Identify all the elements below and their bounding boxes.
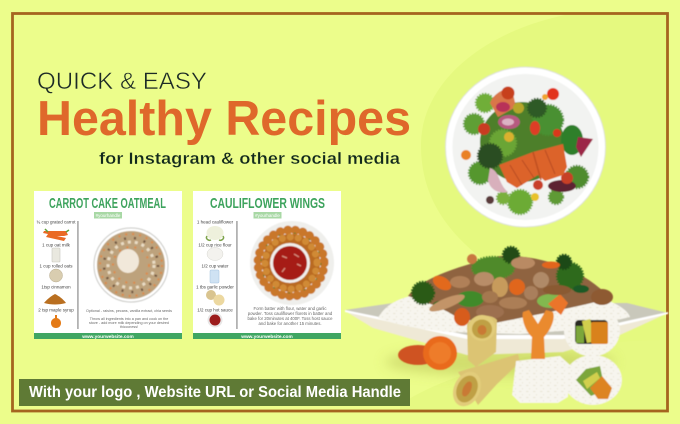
icon: shrimp nigiri [512, 310, 570, 403]
icon: carrot slices [398, 336, 457, 370]
instructions text: powder. Toss cauliflower florets in batter and [248, 311, 333, 316]
social handle tag [254, 212, 282, 218]
instructions text [248, 306, 333, 326]
social handle tag [94, 212, 122, 218]
icon: rectangular plate [345, 303, 668, 376]
icon: oatmeal bowl [94, 228, 168, 302]
social handle tag: #yourhandle [255, 213, 280, 218]
ingredient list: ¾ cup grated carrot [36, 220, 76, 224]
recipe card: carrot cake oatmeal [34, 191, 182, 340]
card title: CARROT CAKE OATMEAL [49, 195, 166, 212]
bottom banner: With your logo , Website URL or Social Media Handle [29, 384, 401, 401]
instructions text: stove - add more milk depending on your desired [89, 321, 169, 325]
icon: sushi roll bottom [564, 355, 622, 405]
instructions text: Throw all ingredients into a pan and cook on the [90, 317, 168, 321]
icon: salad plate with salmon [446, 67, 606, 227]
icon: stir fry with rice [378, 247, 630, 334]
subtitle: for Instagram & other social media [99, 149, 401, 168]
instructions text: Optional - raisins, pecans, vanilla extract, chia seeds [86, 309, 172, 313]
ingredient list: 2 tsp maple syrup [38, 308, 74, 312]
icon: upright spring roll [467, 315, 497, 367]
divider [236, 221, 238, 329]
icon: lying spring roll [448, 354, 520, 411]
social handle tag: #yourhandle [96, 213, 121, 218]
main title: Healthy Recipes [37, 92, 411, 146]
footer bar: www.yourwebsite.com [240, 334, 293, 340]
instructions text: bake for 20minutes at 400F. Toss host sauce [248, 316, 333, 321]
recipe card: cauliflower wings [193, 191, 341, 340]
footer bar: www.yourwebsite.com [81, 334, 134, 340]
ingredient list: 1 cup oat milk [42, 242, 71, 248]
divider [76, 221, 79, 329]
instructions text [86, 309, 172, 329]
ingredient list: 1 tbs garlic powder [196, 284, 234, 290]
ingredient list: 1tsp cinnamon [41, 284, 71, 290]
card title: CAULIFLOWER WINGS [210, 195, 325, 212]
heading block [37, 68, 411, 168]
heading line: quick and easy: QUICK & EASY [37, 68, 207, 95]
footer bar [193, 333, 341, 340]
instructions text: Form batter with flour, water and garlic [253, 306, 327, 311]
ingredient list [196, 220, 234, 328]
ingredient list: 1/2 cup hot sauce [197, 308, 233, 312]
instructions text: and bake for another 15 minutes. [258, 321, 322, 326]
ingredient list: 1/2 cup rice flour [198, 242, 232, 248]
ingredient list: 1/2 cup water [201, 264, 229, 268]
food group: stir fry, rolls and sushi [345, 247, 668, 411]
footer bar [34, 333, 182, 340]
icon: cauliflower wings plate [250, 221, 334, 305]
ingredient list [36, 220, 76, 328]
instructions text: thicccness! [120, 325, 138, 329]
ingredient list: 1 head cauliflower [197, 220, 234, 224]
icon: sushi roll top [564, 306, 620, 356]
bottom banner [19, 379, 410, 406]
ingredient list: 1 cup rolled oats [39, 264, 73, 268]
